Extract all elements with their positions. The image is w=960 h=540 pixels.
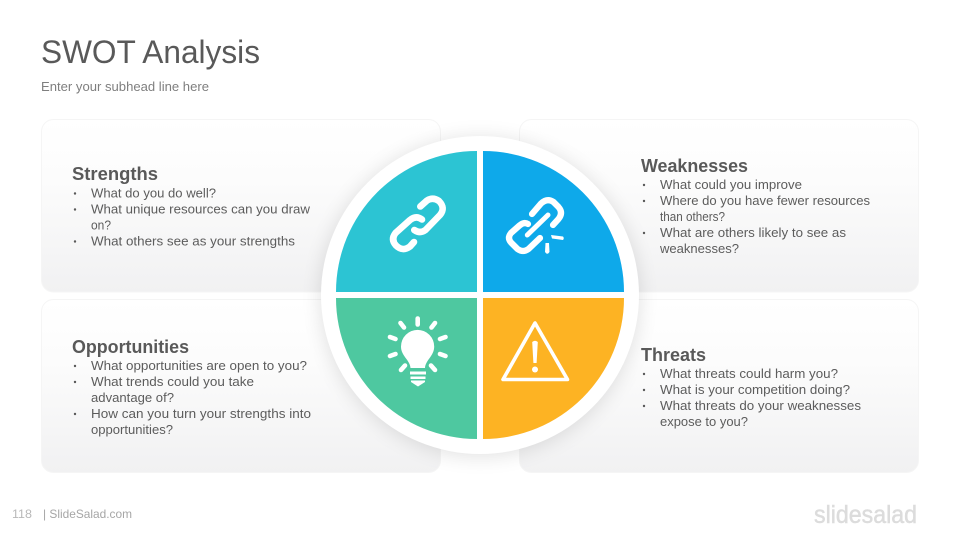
panel: threats card bbox=[520, 300, 918, 472]
strengths text: What unique resources can you draw bbox=[91, 202, 311, 216]
quadrant: strengths bbox=[336, 151, 477, 292]
weaknesses text: than others? bbox=[660, 209, 725, 224]
opportunities text: advantage of? bbox=[91, 390, 174, 405]
title: SWOT Analysis bbox=[41, 34, 260, 70]
white ring bbox=[321, 136, 639, 454]
strengths text bbox=[72, 163, 311, 248]
strengths text: Strengths bbox=[72, 163, 158, 184]
icon: break sparks bbox=[545, 235, 564, 254]
page number: 118 bbox=[12, 507, 32, 521]
weaknesses text: Where do you have fewer resources bbox=[660, 193, 870, 208]
icon: chain link bbox=[393, 199, 443, 249]
opportunities text bbox=[72, 336, 311, 437]
weaknesses text: What are others likely to see as bbox=[660, 225, 847, 240]
strengths text: What do you do well? bbox=[91, 186, 216, 200]
circle shadow bbox=[321, 138, 639, 456]
opportunities text: What trends could you take bbox=[91, 374, 254, 389]
strengths text: on? bbox=[91, 218, 111, 232]
opportunities text: How can you turn your strengths into bbox=[91, 406, 311, 421]
subhead: Enter your subhead line here bbox=[41, 79, 209, 94]
threats text: What threats do your weaknesses bbox=[660, 398, 862, 413]
threats text: Threats bbox=[641, 344, 706, 365]
weaknesses text: What could you improve bbox=[660, 177, 802, 192]
panel: strengths card bbox=[42, 120, 440, 292]
icon: warning triangle bbox=[503, 323, 568, 380]
weaknesses text: weaknesses? bbox=[659, 241, 739, 256]
panel: weaknesses card bbox=[520, 120, 918, 292]
quadrant: weaknesses bbox=[483, 151, 624, 292]
footer credit: | SlideSalad.com bbox=[43, 507, 132, 521]
threats text: What threats could harm you? bbox=[660, 366, 838, 381]
panel: opportunities card bbox=[42, 300, 440, 472]
quadrant: opportunities bbox=[336, 298, 477, 439]
logo wordmark: slidesalad bbox=[814, 501, 917, 529]
opportunities text: opportunities? bbox=[91, 422, 173, 437]
icon: light bulb bbox=[390, 318, 446, 386]
threats text: expose to you? bbox=[660, 414, 748, 429]
opportunities text: Opportunities bbox=[72, 336, 189, 357]
weaknesses text bbox=[641, 155, 870, 256]
strengths text: What others see as your strengths bbox=[91, 234, 296, 248]
weaknesses text: Weaknesses bbox=[641, 155, 748, 176]
icon: broken chain link bbox=[509, 200, 561, 251]
threats text: What is your competition doing? bbox=[660, 382, 850, 397]
opportunities text: What opportunities are open to you? bbox=[91, 358, 307, 373]
quadrant: threats bbox=[483, 298, 624, 439]
threats text bbox=[641, 344, 862, 429]
